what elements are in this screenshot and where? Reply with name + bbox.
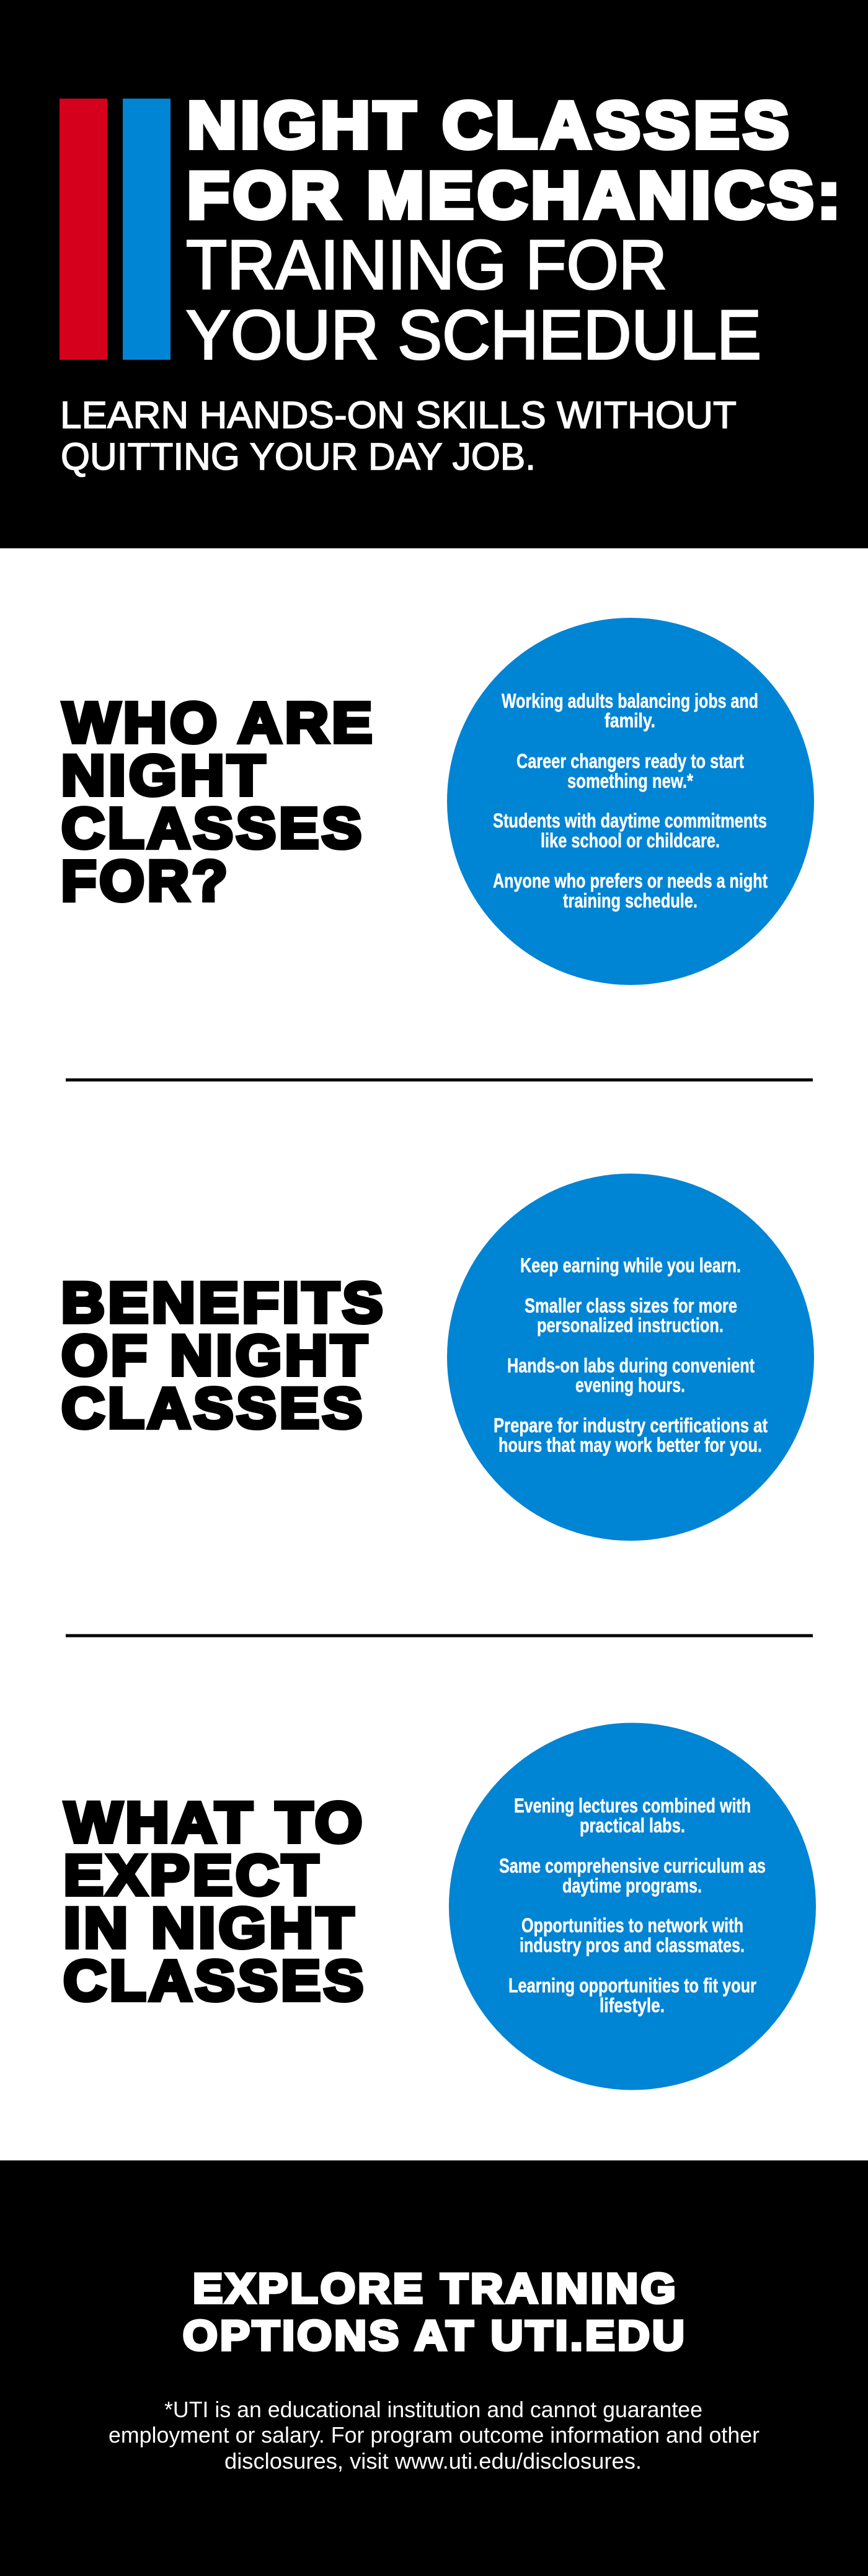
- title: YOUR SCHEDULE: [186, 296, 761, 373]
- circle: expectations list: Learning opportunities to fit your: [508, 1974, 756, 1997]
- panel: who are night classes for: [61, 618, 814, 985]
- title: [186, 89, 844, 373]
- heading: who are night classes for: NIGHT: [61, 744, 268, 808]
- heading: benefits of night classes: OF NIGHT: [61, 1324, 370, 1387]
- panel: header: [0, 0, 868, 548]
- title: TRAINING FOR: [186, 226, 667, 304]
- heading: benefits of night classes: BENEFITS: [61, 1272, 386, 1335]
- footnote: disclosures, visit www.uti.edu/disclosures.: [224, 2448, 642, 2474]
- footnote: *UTI is an educational institution and cannot guarantee: [164, 2397, 702, 2422]
- circle: expectations list: lifestyle.: [600, 1994, 665, 2017]
- tagline: LEARN HANDS-ON SKILLS WITHOUT: [60, 394, 737, 436]
- circle: expectations list: Evening lectures combined with: [514, 1794, 751, 1817]
- heading: what to expect in night classes: WHAT TO: [64, 1791, 366, 1855]
- icon: blue bar: [123, 99, 170, 360]
- circle: expectations list: Same comprehensive curriculum as: [499, 1855, 766, 1877]
- circle: audience list: Career changers ready to start: [516, 750, 744, 772]
- circle: audience list: training schedule.: [563, 889, 698, 912]
- call to action: OPTIONS AT UTI.EDU: [183, 2312, 687, 2360]
- circle: audience list: family.: [604, 710, 655, 732]
- icon: red bar: [60, 99, 107, 360]
- call to action: [183, 2265, 687, 2360]
- panel: what to expect in night classes: [63, 1723, 816, 2090]
- heading: who are night classes for: FOR?: [61, 850, 231, 913]
- heading: benefits of night classes: CLASSES: [61, 1377, 365, 1440]
- circle: expectations list: industry pros and classmates.: [520, 1934, 745, 1956]
- heading: what to expect in night classes: CLASSES: [63, 1949, 366, 2012]
- tagline: [60, 394, 737, 478]
- heading: what to expect in night classes: EXPECT: [64, 1843, 322, 1907]
- circle: benefits list: [447, 1174, 814, 1541]
- footnote: employment or salary. For program outcome information and other: [108, 2422, 760, 2448]
- heading: benefits of night classes: [61, 1272, 386, 1440]
- circle: benefits list: evening hours.: [575, 1374, 685, 1396]
- circle: benefits list: Keep earning while you learn.: [520, 1254, 741, 1277]
- circle: expectations list: daytime programs.: [562, 1874, 702, 1897]
- footnote: [108, 2397, 760, 2474]
- circle: benefits list: hours that may work better for you.: [498, 1434, 762, 1456]
- panel: footer: [0, 2160, 868, 2576]
- circle: expectations list: [449, 1723, 816, 2090]
- title: FOR MECHANICS:: [187, 159, 844, 232]
- heading: what to expect in night classes: IN NIGHT: [64, 1897, 357, 1960]
- circle: audience list: Working adults balancing jobs and: [502, 690, 758, 712]
- circle: benefits list: Prepare for industry certifications at: [494, 1414, 768, 1437]
- panel: benefits of night classes: [61, 1174, 814, 1541]
- circle: expectations list: Opportunities to network with: [521, 1914, 743, 1936]
- circle: audience list: something new.*: [567, 770, 693, 792]
- circle: benefits list: Smaller class sizes for more: [525, 1295, 737, 1317]
- circle: expectations list: practical labs.: [580, 1814, 685, 1837]
- circle: audience list: Anyone who prefers or needs a night: [493, 870, 768, 892]
- heading: what to expect in night classes: [63, 1791, 366, 2012]
- circle: audience list: Students with daytime commitments: [493, 809, 767, 832]
- circle: audience list: [447, 618, 814, 985]
- circle: benefits list: personalized instruction.: [537, 1314, 724, 1336]
- tagline: QUITTING YOUR DAY JOB.: [61, 435, 536, 478]
- heading: who are night classes for: WHO ARE: [63, 691, 376, 754]
- heading: who are night classes for: [61, 691, 375, 913]
- title: NIGHT CLASSES: [187, 89, 792, 162]
- call to action: EXPLORE TRAINING: [193, 2265, 678, 2312]
- heading: who are night classes for: CLASSES: [61, 796, 365, 860]
- circle: benefits list: Hands-on labs during convenient: [507, 1355, 755, 1377]
- circle: audience list: like school or childcare.: [541, 829, 720, 852]
